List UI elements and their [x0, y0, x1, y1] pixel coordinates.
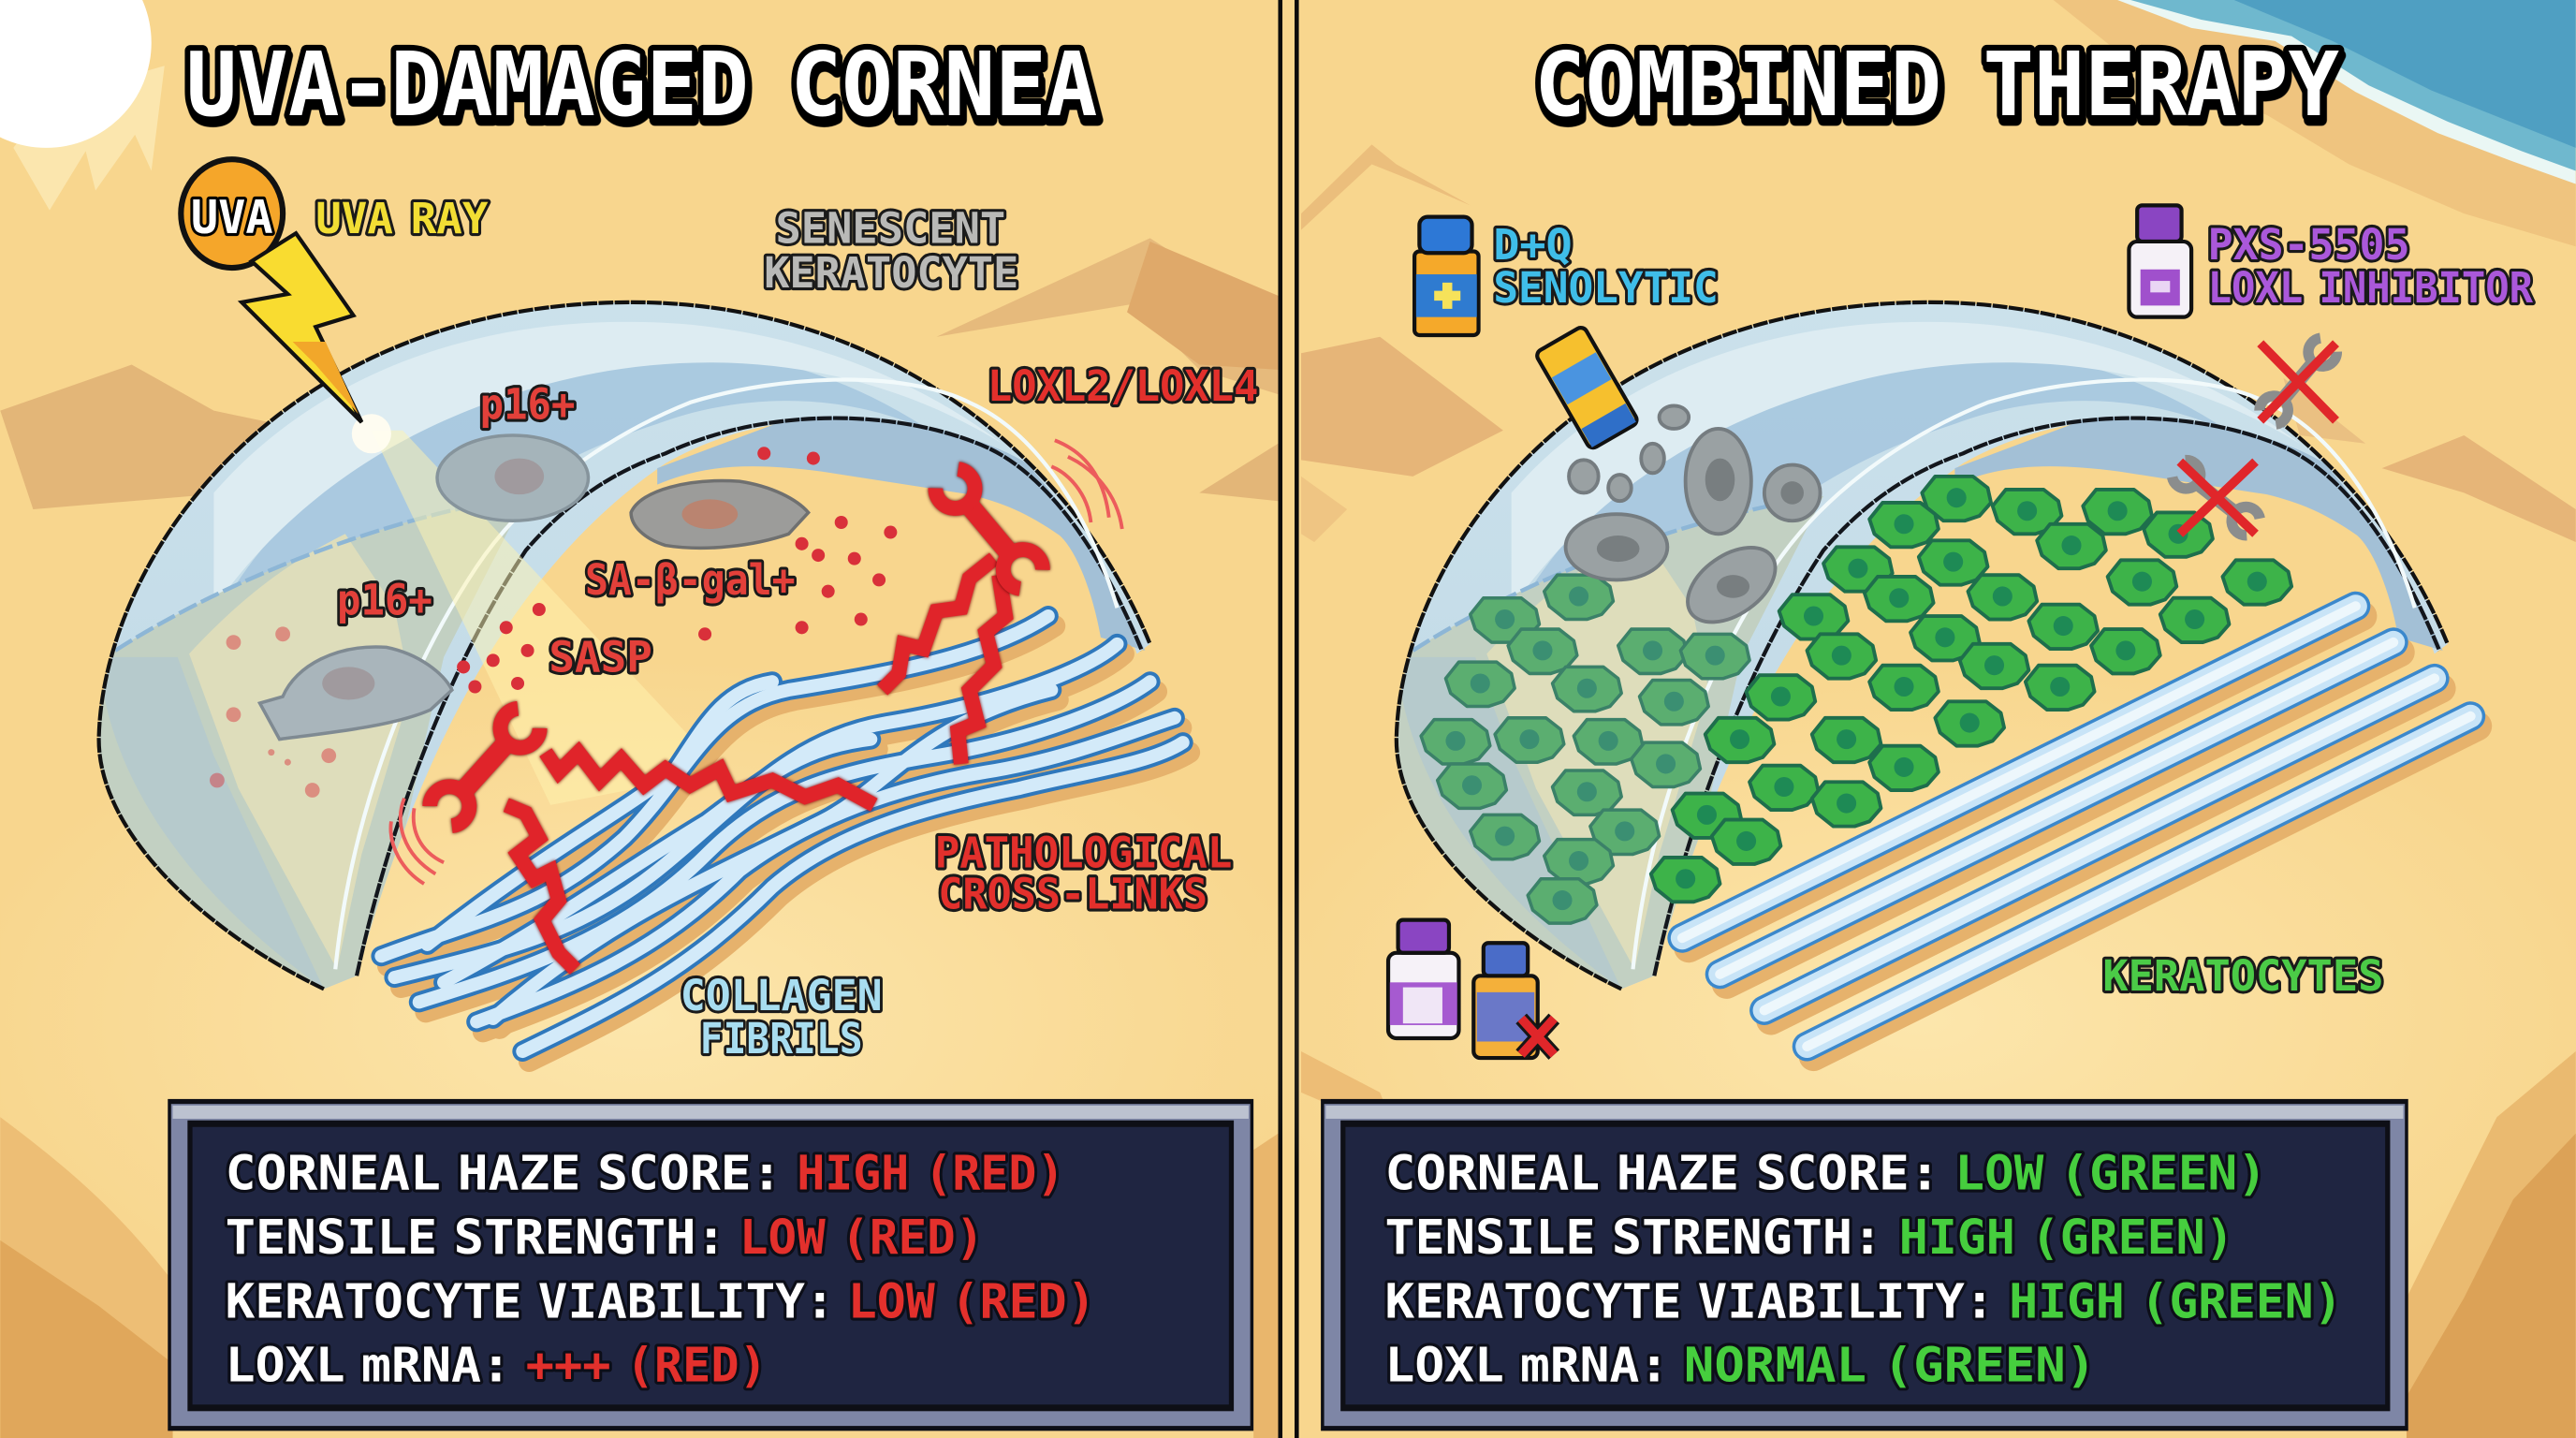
label: pathological cross-links: CROSS-LINKS — [938, 869, 1208, 918]
stat: corneal haze: HIGH (RED) — [797, 1145, 1064, 1200]
stat: corneal haze: LOW (GREEN) — [1954, 1145, 2267, 1200]
left panel — [0, 0, 1331, 1438]
icon: inhibited wrench top — [2257, 336, 2339, 427]
background: left desert — [0, 238, 1331, 1438]
label: LOXL2/LOXL4: LOXL2/LOXL4 — [988, 361, 1258, 411]
stat: LOXL mRNA: +++ (RED) — [526, 1338, 768, 1393]
SASP dots — [210, 447, 897, 798]
icon: LOXL wrench left — [426, 705, 544, 829]
pathological cross-links — [506, 559, 1005, 969]
label: SASP: SASP — [549, 633, 652, 682]
icon: LOXL wrench right — [931, 466, 1046, 592]
label: D+Q senolytic: D+Q — [1493, 220, 1573, 270]
label: keratocytes: KERATOCYTES — [2102, 951, 2383, 1001]
stat: LOXL mRNA: LOXL mRNA: — [1385, 1338, 1669, 1393]
dying senescent cells — [1566, 405, 1821, 638]
label: PXS-5505 LOXL inhibitor: PXS-5505 — [2208, 220, 2409, 270]
icon: small purple bottle — [1388, 920, 1458, 1038]
activity waves — [390, 440, 1122, 884]
stat: keratocyte viability: KERATOCYTE VIABILITY: — [226, 1273, 835, 1328]
right panel — [1232, 0, 2576, 1438]
label: D+Q senolytic: SENOLYTIC — [1493, 263, 1719, 313]
label: collagen fibrils: COLLAGEN — [681, 971, 883, 1020]
icon: sun — [0, 0, 165, 211]
title: UVA-DAMAGED CORNEA — [186, 34, 1097, 137]
label: p16+ top: p16+ — [480, 379, 575, 429]
senescent keratocyte cells — [260, 435, 809, 740]
label: UVA ray: UVA RAY — [315, 194, 489, 243]
icon: lightning bolt — [242, 233, 361, 422]
stat: corneal haze: CORNEAL HAZE SCORE: — [1385, 1145, 1940, 1200]
center divider — [1278, 0, 1299, 1438]
label: senescent keratocyte: SENESCENT — [776, 204, 1005, 254]
stat: keratocyte viability: HIGH (GREEN) — [2009, 1273, 2343, 1328]
cornea dome: treated — [1397, 302, 2448, 1002]
light beam — [352, 414, 723, 805]
keratocytes: healthy cells — [1651, 477, 2291, 902]
stat: tensile strength: TENSILE STRENGTH: — [1385, 1210, 1882, 1265]
background: right desert and sea — [1232, 0, 2576, 1438]
icon: small D+Q bottle crossed out — [1473, 943, 1554, 1058]
stat: LOXL mRNA: LOXL mRNA: — [226, 1338, 511, 1393]
stat: keratocyte viability: KERATOCYTE VIABILITY: — [1385, 1273, 1995, 1328]
cell nuclei — [1445, 488, 2267, 910]
icon: D+Q bottle — [1414, 217, 1479, 335]
label: PXS-5505 LOXL inhibitor: LOXL INHIBITOR — [2208, 263, 2534, 313]
title: COMBINED THERAPY — [1534, 34, 2339, 137]
stats panel: damaged — [168, 1099, 1253, 1431]
stats panel: therapy — [1321, 1099, 2408, 1431]
stat: corneal haze: CORNEAL HAZE SCORE: — [226, 1145, 783, 1200]
icon: PXS-5505 bottle — [2129, 205, 2191, 317]
keratocytes: seen through glass — [1421, 575, 1749, 923]
label: p16+ lower: p16+ — [337, 575, 432, 624]
icon: capsule — [1535, 326, 1639, 450]
stat: tensile strength: HIGH (GREEN) — [1899, 1210, 2234, 1265]
label: collagen fibrils: FIBRILS — [700, 1014, 863, 1064]
label: senescent keratocyte: KERATOCYTE — [764, 248, 1018, 298]
collagen fibrils: orderly — [1682, 606, 2477, 1056]
cornea dome: damaged — [99, 302, 1150, 1002]
stat: LOXL mRNA: NORMAL (GREEN) — [1684, 1338, 2096, 1393]
label: pathological cross-links: PATHOLOGICAL — [935, 828, 1232, 877]
stat: tensile strength: LOW (RED) — [739, 1210, 984, 1265]
collagen fibrils: tangled — [381, 616, 1190, 1062]
stat: tensile strength: TENSILE STRENGTH: — [226, 1210, 726, 1265]
icon: inhibited wrench lower — [2170, 458, 2262, 538]
label: SA-beta-gal: SA-β-gal+ — [585, 555, 796, 605]
stat: keratocyte viability: LOW (RED) — [848, 1273, 1096, 1328]
icon: UVA sun badge — [181, 159, 283, 268]
icon: UVA sun badge: UVA — [191, 190, 273, 244]
